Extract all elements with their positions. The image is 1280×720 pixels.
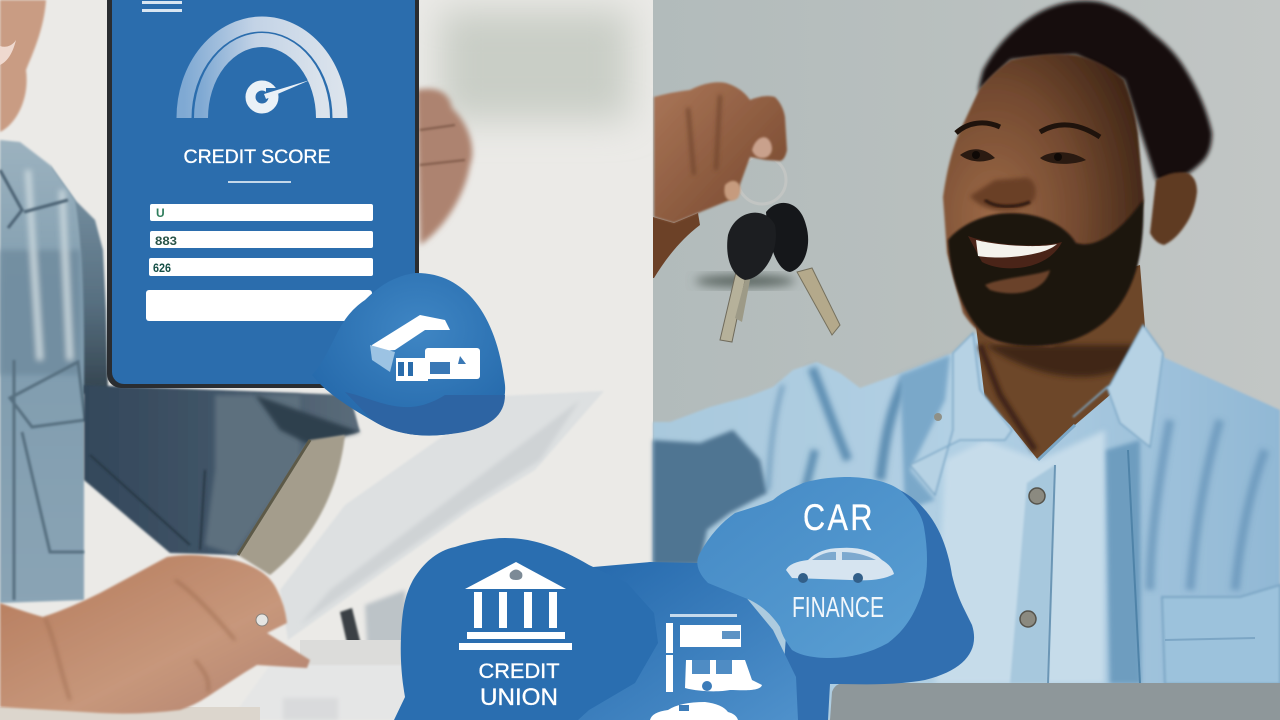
- bank icon: [459, 562, 572, 650]
- loan icon: [370, 315, 480, 381]
- shirt folds: [768, 368, 1265, 590]
- paper document: [280, 391, 604, 640]
- score rows: U: [156, 206, 165, 220]
- beard: [948, 200, 1143, 346]
- small caption line: [228, 181, 291, 183]
- right seam band: [1106, 440, 1141, 684]
- writing hand: [0, 555, 310, 714]
- collar button: [934, 413, 942, 421]
- credit score gauge: [184, 24, 340, 118]
- tablet body: [107, 0, 419, 388]
- shirt buttons: [1020, 488, 1045, 627]
- sleeve shadow: [653, 430, 767, 565]
- nose: [970, 177, 1036, 211]
- car icon: [786, 548, 894, 583]
- eyes: [960, 149, 1086, 164]
- chin skin patch: [985, 270, 1050, 293]
- score rows: 626: [153, 261, 171, 275]
- mouth: [968, 236, 1062, 268]
- teeth: [976, 240, 1057, 258]
- car bubble: [697, 477, 927, 658]
- dealership icon: [650, 614, 762, 720]
- chest pocket: [1162, 585, 1280, 684]
- car financing label: FINANCE: [792, 592, 884, 624]
- jeans: [84, 385, 360, 555]
- panel: blue bubbles: [394, 477, 974, 720]
- desk items: [363, 589, 407, 640]
- tablet: [107, 0, 419, 388]
- score rows: [149, 204, 373, 276]
- credit union bubble: [394, 538, 658, 720]
- collar: [910, 325, 1163, 495]
- jacket pocket: [10, 360, 85, 600]
- credit union label: CREDIT: [478, 660, 560, 683]
- jacket shading: [0, 170, 80, 375]
- blurred shadow behind keys: [695, 275, 795, 287]
- forearm: [653, 213, 700, 278]
- ring and pen: [256, 614, 268, 626]
- laptop: [830, 683, 1280, 720]
- middle bubble: [560, 562, 798, 720]
- hand at tablet edge: [416, 89, 472, 245]
- neck edge of the shirt: [1038, 425, 1075, 460]
- shirt: [653, 325, 1280, 720]
- person torso in denim jacket: [0, 140, 84, 603]
- face: [943, 54, 1144, 347]
- hair: [978, 1, 1212, 182]
- left shoulder panel: [900, 355, 950, 510]
- light centre panel of the shirt: [935, 430, 1105, 684]
- back blue bubble: [780, 482, 974, 720]
- blue bubble with car loan icon: [312, 273, 505, 436]
- tan knee patch: [238, 435, 345, 575]
- jacket seam: [0, 170, 68, 228]
- jacket sleeve: [50, 165, 108, 395]
- eyebrows: [956, 123, 1100, 137]
- panel: right photo of man with car keys: [653, 0, 1280, 720]
- placket: [1010, 465, 1055, 684]
- hand holding keys: [654, 82, 787, 223]
- left photo background: [0, 0, 653, 720]
- nostril: [985, 200, 1030, 206]
- neck: [975, 265, 1145, 460]
- credit union bubble: UNION: [480, 684, 558, 711]
- tablet heading: CREDIT SCORE: [184, 146, 330, 168]
- score rows: 883: [155, 234, 177, 248]
- car keys: [720, 203, 840, 342]
- menu icon: [142, 1, 182, 12]
- ear: [1150, 172, 1197, 245]
- right photo background: [653, 0, 1280, 720]
- large input box: [146, 290, 372, 321]
- key ring: [738, 156, 786, 204]
- car label: CAR: [803, 497, 875, 538]
- face of person on the left: [0, 0, 46, 132]
- panel: left photo of credit check: [0, 0, 653, 720]
